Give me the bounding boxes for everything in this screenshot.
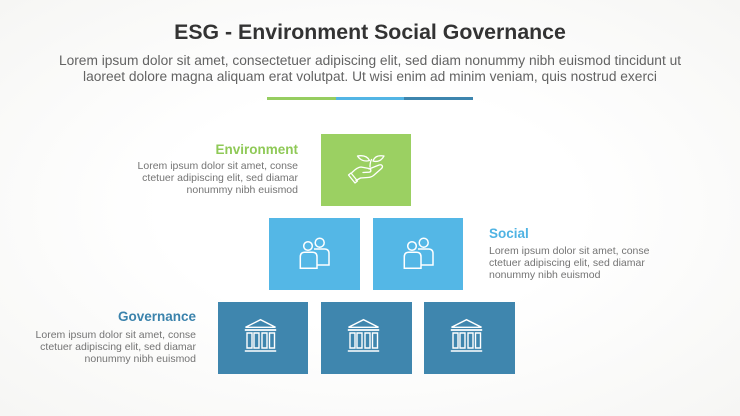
intro text: laoreet dolore magna aliquam erat volutpat. Ut wisi enim ad minim veniam, quis nostrud exerci (83, 68, 657, 84)
tricolor divider (267, 97, 473, 100)
text: environment: ctetuer adipiscing elit, sed diamar (142, 172, 298, 184)
text: governance: nonummy nibh euismod (85, 353, 196, 365)
intro text: Lorem ipsum dolor sit amet, consectetuer adipiscing elit, sed diam nonummy nibh euismod tincidunt ut (59, 53, 681, 68)
icon: people (300, 238, 330, 269)
pyramid block: governance left (218, 302, 308, 374)
text: environment (138, 160, 298, 196)
intro text (59, 53, 681, 84)
icon: institution building (450, 318, 482, 352)
text: environment: Lorem ipsum dolor sit amet, conse (138, 160, 298, 172)
heading: governance: Governance (118, 309, 196, 324)
label: environment (138, 142, 298, 196)
pyramid block: social right (372, 218, 463, 290)
heading: social: Social (489, 226, 529, 241)
heading: environment: Environment (215, 142, 298, 157)
pyramid block: environment (321, 134, 411, 206)
pyramid block: governance middle (321, 302, 412, 374)
pyramid block: governance right (424, 302, 514, 374)
text: governance (36, 329, 196, 365)
pyramid block: social left (269, 218, 360, 290)
icon: institution building (244, 318, 276, 352)
label: social (489, 226, 649, 281)
icon: hand holding plant (348, 155, 385, 184)
label: governance (36, 309, 196, 365)
text: governance: ctetuer adipiscing elit, sed diamar (40, 341, 196, 353)
icon: institution building (348, 318, 380, 352)
text: social (489, 245, 649, 281)
text: social: Lorem ipsum dolor sit amet, conse (489, 245, 649, 257)
text: social: nonummy nibh euismod (489, 269, 600, 281)
text: social: ctetuer adipiscing elit, sed diamar (489, 257, 645, 269)
title: ESG - Environment Social Governance (174, 20, 566, 44)
text: environment: nonummy nibh euismod (187, 184, 298, 196)
icon: people (404, 238, 434, 269)
text: governance: Lorem ipsum dolor sit amet, conse (36, 329, 196, 341)
